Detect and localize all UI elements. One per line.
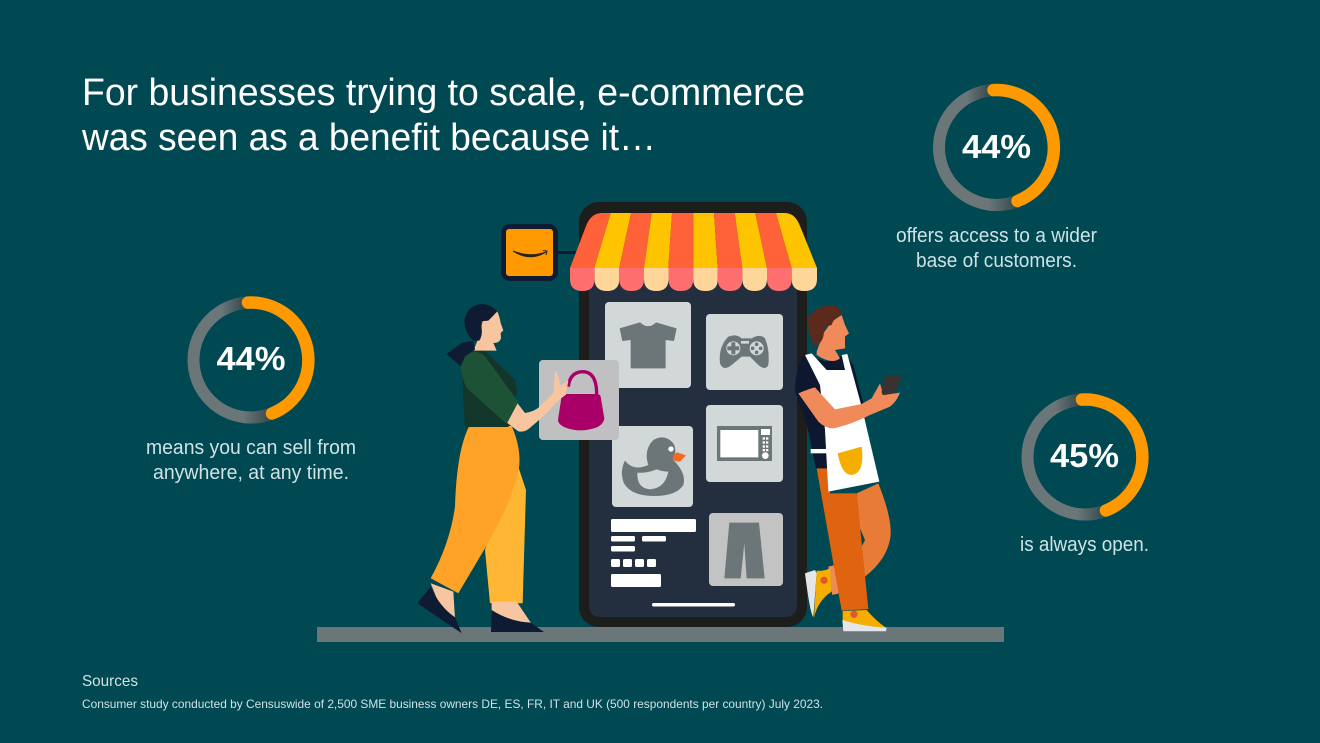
torso xyxy=(795,354,863,468)
caption right: is always open. xyxy=(1020,534,1149,556)
title: was seen as a benefit because it… xyxy=(81,117,656,159)
stat: sell from anywhere xyxy=(146,302,356,484)
donut chart 44% left: 44% xyxy=(216,340,286,377)
hair xyxy=(808,305,842,347)
title: For businesses trying to scale, e-commerce xyxy=(82,72,805,114)
floor xyxy=(317,627,1004,642)
icon: amazon app badge xyxy=(501,224,576,281)
sources: Consumer study conducted by Censuswide of 2,500 SME business owners DE, ES, FR, IT and UK (500 respondents per country) July 2023. xyxy=(82,697,823,711)
sources: Sources xyxy=(82,673,138,690)
woman shopper xyxy=(417,304,568,633)
back leg xyxy=(857,483,891,577)
feet xyxy=(431,583,532,624)
donut chart 45% right: 45% xyxy=(1050,437,1119,474)
stat: wider customer base xyxy=(896,90,1097,272)
caption top right: base of customers. xyxy=(916,250,1077,272)
front shoe xyxy=(842,610,887,631)
caption top right: offers access to a wider xyxy=(896,225,1097,247)
card: game controller xyxy=(706,314,783,390)
title xyxy=(81,72,805,159)
mobile phone xyxy=(882,375,902,395)
back leg xyxy=(485,457,526,603)
donut chart 44% top right xyxy=(939,90,1054,205)
caption top right xyxy=(896,225,1097,272)
apron xyxy=(805,353,879,492)
head and neck xyxy=(473,311,503,351)
woman upper body xyxy=(447,304,568,432)
back shoe xyxy=(805,568,832,617)
sleeve xyxy=(461,352,518,424)
awning xyxy=(570,213,817,291)
donut chart 44% top right: 44% xyxy=(962,128,1031,165)
home bar xyxy=(652,603,735,606)
back shin xyxy=(828,565,839,595)
product text placeholders xyxy=(611,519,696,587)
phone storefront xyxy=(570,202,817,627)
neck and face xyxy=(817,315,849,361)
woman legs xyxy=(417,426,544,633)
arm and hand xyxy=(506,371,568,432)
donut chart 44% left xyxy=(194,302,308,418)
stat: always open xyxy=(1020,400,1149,556)
card: handbag xyxy=(539,360,619,440)
apron strap xyxy=(811,449,827,453)
front leg xyxy=(431,426,519,593)
phone body xyxy=(579,202,807,627)
card: microwave xyxy=(706,405,783,482)
ponytail xyxy=(447,341,475,366)
hair xyxy=(464,304,497,341)
shoes xyxy=(417,587,544,633)
pocket xyxy=(838,447,862,475)
front leg xyxy=(817,468,868,611)
shirt back xyxy=(462,350,517,427)
card: trousers xyxy=(709,513,783,586)
arm and hand xyxy=(798,383,900,428)
donut chart 45% right xyxy=(1028,400,1142,515)
caption left xyxy=(146,437,356,484)
caption left: anywhere, at any time. xyxy=(153,462,349,484)
card: t-shirt xyxy=(605,302,691,388)
sources xyxy=(82,673,823,711)
shopkeeper man xyxy=(795,305,902,631)
caption left: means you can sell from xyxy=(146,437,356,459)
card: rubber duck xyxy=(612,426,693,507)
